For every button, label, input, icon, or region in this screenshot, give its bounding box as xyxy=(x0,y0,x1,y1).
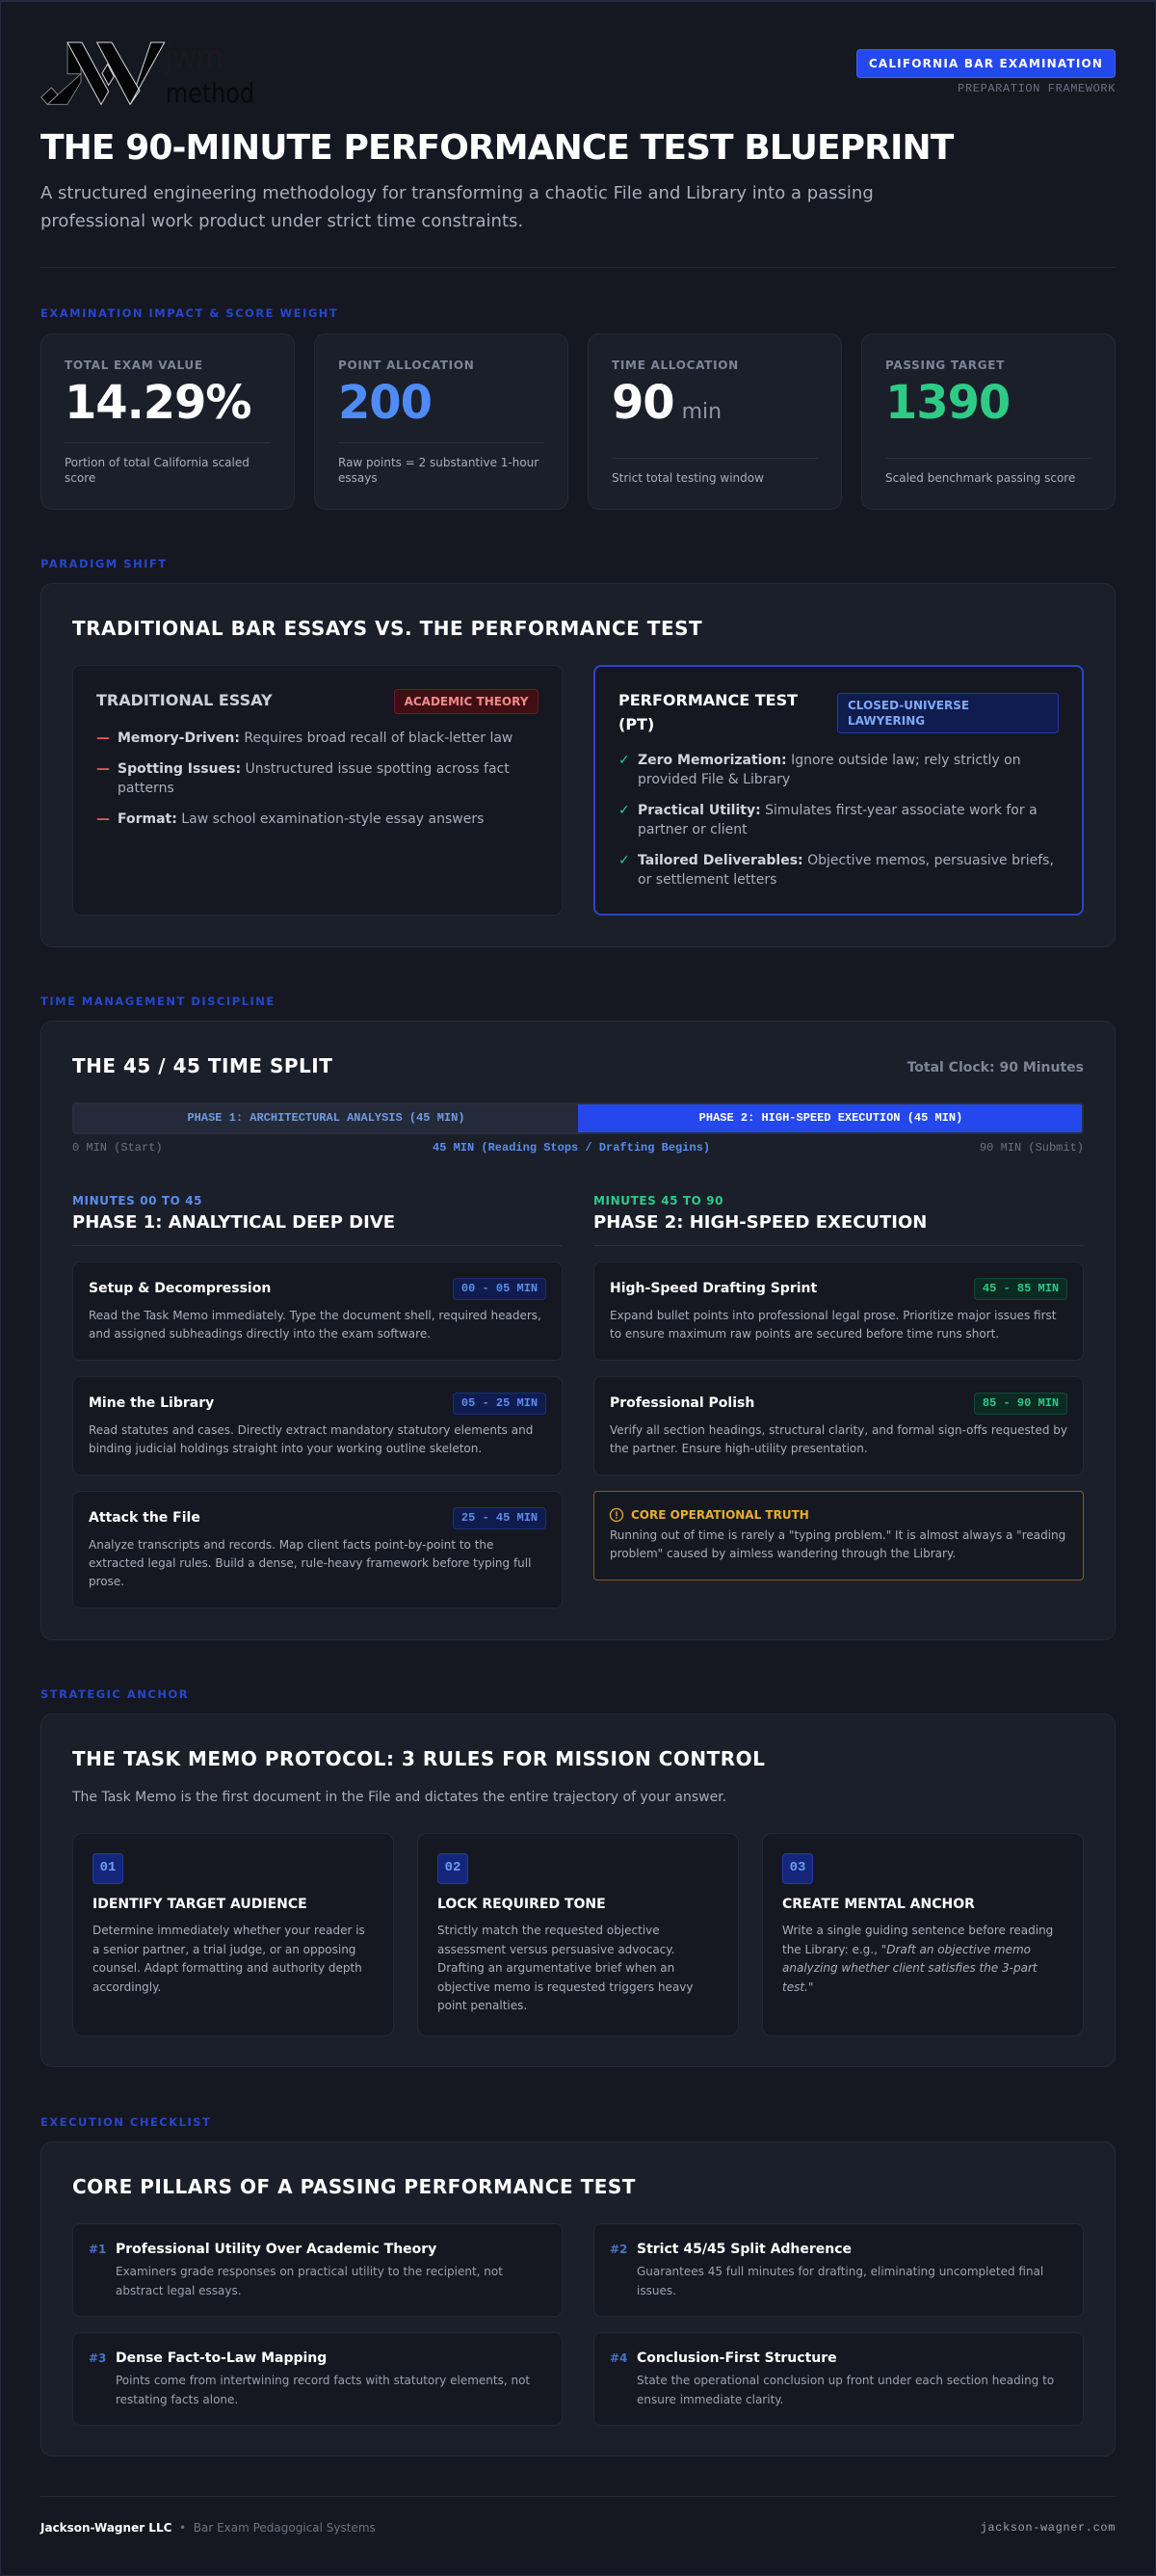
stat card: passing target: Scaled benchmark passing score xyxy=(885,471,1075,485)
rule card 3 xyxy=(762,1833,1084,2036)
stat card: total exam value: TOTAL EXAM VALUE xyxy=(65,359,203,372)
subtitle xyxy=(40,183,874,231)
panel: task memo protocol xyxy=(40,1713,1116,2067)
rule card 1: IDENTIFY TARGET AUDIENCE xyxy=(92,1897,307,1912)
pillar card 1: Professional Utility Over Academic Theory xyxy=(116,2242,436,2257)
column heading: phase 1: MINUTES 00 TO 45 xyxy=(72,1194,202,1208)
stat card: point allocation: Raw points = 2 substantive 1-hour essays xyxy=(338,456,539,485)
list: performance test items: Practical Utility: Simulates first-year associate work for a partner or client xyxy=(638,803,1038,837)
footer xyxy=(39,2521,1116,2535)
section label: execution checklist: EXECUTION CHECKLIST xyxy=(40,2115,211,2129)
badge: closed-universe lawyering: CLOSED-UNIVERSE xyxy=(848,699,969,712)
subtitle: A structured engineering methodology for transforming a chaotic File and Library into a passing xyxy=(40,183,874,203)
heading: THE 45 / 45 TIME SPLIT xyxy=(72,1054,332,1077)
stat card: total exam value: 14.29% xyxy=(65,376,250,430)
stat card: passing target: 1390 xyxy=(885,376,1010,430)
stat card: passing target xyxy=(861,333,1116,510)
rule card 3: Write a single guiding sentence before reading the Library: e.g., "Draft an objective memo analyzing whether client satisfies the 3-part test." xyxy=(782,1924,1053,1993)
step card: professional polish: 85 - 90 MIN xyxy=(983,1396,1059,1410)
pillar card 2: Strict 45/45 Split Adherence xyxy=(637,2242,852,2257)
panel: paradigm shift xyxy=(40,583,1116,947)
section label: strategic anchor: STRATEGIC ANCHOR xyxy=(40,1687,189,1701)
timeline marker: midpoint: 45 MIN (Reading Stops / Drafting Begins) xyxy=(433,1141,710,1155)
logo: jwm xyxy=(165,40,223,75)
step card: setup: Read the Task Memo immediately. Type the document shell, required headers, and assigned subheadings directly into the exam software. xyxy=(89,1309,541,1341)
rule card 2 xyxy=(417,1833,739,2036)
pillar card 4: State the operational conclusion up front under each section heading to ensure immediate clarity. xyxy=(637,2374,1054,2406)
callout text: Running out of time is rarely a "typing problem." It is almost always a "reading problem" caused by aimless wandering through the Library. xyxy=(610,1528,1065,1560)
step card: setup xyxy=(72,1261,563,1361)
logo xyxy=(40,40,254,109)
column heading: phase 1 xyxy=(72,1192,563,1246)
list: performance test items: ✓ xyxy=(618,853,630,868)
section label: time management: TIME MANAGEMENT DISCIPLINE xyxy=(40,995,276,1008)
list: traditional items: — xyxy=(96,730,110,746)
stat card: time allocation xyxy=(588,333,842,510)
stat card: point allocation: POINT ALLOCATION xyxy=(338,359,474,372)
step card: mine the library xyxy=(72,1376,563,1475)
list: traditional items: Format: Law school examination-style essay answers xyxy=(118,811,484,827)
rule card 2: 02 xyxy=(445,1860,460,1875)
step card: mine the library: Read statutes and cases. Directly extract mandatory statutory elements and binding judicial holdings straight into your working outline skeleton. xyxy=(89,1423,533,1455)
rule card 2: LOCK REQUIRED TONE xyxy=(437,1897,606,1912)
section label: examination impact: EXAMINATION IMPACT & SCORE WEIGHT xyxy=(40,306,338,320)
step card: setup: 00 - 05 MIN xyxy=(461,1282,538,1295)
rule card 3: 03 xyxy=(790,1860,805,1875)
heading: CORE PILLARS OF A PASSING PERFORMANCE TEST xyxy=(72,2175,636,2198)
stat card: total exam value: Portion of total California scaled score xyxy=(65,456,250,485)
step card: professional polish: Professional Polish xyxy=(610,1395,754,1411)
stat card: point allocation xyxy=(314,333,568,510)
callout: core operational truth xyxy=(593,1491,1084,1580)
step card: drafting sprint: Expand bullet points into professional legal prose. Prioritize major issues first to ensure maximum raw points are secured before time runs short. xyxy=(610,1309,1056,1341)
pillar card 4: Conclusion-First Structure xyxy=(637,2350,837,2366)
step card: mine the library: Mine the Library xyxy=(89,1395,214,1411)
badge: academic theory xyxy=(394,689,539,714)
bar segment: phase 2 xyxy=(578,1102,1084,1134)
rule card 1 xyxy=(72,1833,394,2036)
list: traditional items: Memory-Driven: Requires broad recall of black-letter law xyxy=(118,730,512,746)
footer company: Jackson-Wagner LLC • Bar Exam Pedagogical Systems xyxy=(40,2521,376,2535)
column heading: phase 1: PHASE 1: ANALYTICAL DEEP DIVE xyxy=(72,1212,395,1233)
list: performance test items: ✓ xyxy=(618,753,630,768)
list: traditional items: — xyxy=(96,761,110,777)
pillar card 3: Points come from intertwining record facts with statutory elements, not restating facts alone. xyxy=(116,2374,530,2406)
title: THE 90-MINUTE PERFORMANCE TEST BLUEPRINT xyxy=(40,128,953,168)
step card: drafting sprint: High-Speed Drafting Sprint xyxy=(610,1281,817,1296)
list: traditional items: — xyxy=(96,811,110,827)
list: traditional items: Spotting Issues: Unstructured issue spotting across fact patterns xyxy=(118,761,510,796)
step card: attack the file xyxy=(72,1491,563,1608)
performance test heading: PERFORMANCE TEST (PT) xyxy=(618,691,798,732)
heading: TRADITIONAL BAR ESSAYS VS. THE PERFORMANCE TEST xyxy=(72,617,702,640)
section label: paradigm shift: PARADIGM SHIFT xyxy=(40,557,168,571)
column heading: phase 2 xyxy=(593,1192,1084,1246)
pillar card 1: Examiners grade responses on practical utility to the recipient, not abstract legal essays. xyxy=(116,2265,503,2297)
badge: academic theory: ACADEMIC THEORY xyxy=(405,695,528,708)
stat card: point allocation: 200 xyxy=(338,376,432,430)
pillar card 2: Guarantees 45 full minutes for drafting, eliminating uncompleted final issues. xyxy=(637,2265,1043,2297)
traditional essay heading: TRADITIONAL ESSAY xyxy=(96,691,273,709)
badge: California Bar Examination: CALIFORNIA BAR EXAMINATION xyxy=(869,57,1103,70)
logo: method xyxy=(166,77,254,109)
list: traditional items xyxy=(96,730,512,827)
badge: California Bar Examination xyxy=(856,49,1116,78)
step card: drafting sprint: 45 - 85 MIN xyxy=(983,1282,1059,1295)
column heading: phase 2: MINUTES 45 TO 90 xyxy=(593,1194,723,1208)
list: performance test items xyxy=(618,753,1054,888)
pillar card 2: #2 xyxy=(610,2243,627,2256)
stat card: time allocation: TIME ALLOCATION xyxy=(612,359,739,372)
timeline bar xyxy=(72,1102,1084,1134)
total clock note: Total Clock: 90 Minutes xyxy=(907,1060,1084,1076)
step card: setup: Setup & Decompression xyxy=(89,1281,271,1296)
footer url: jackson-wagner.com xyxy=(981,2521,1116,2535)
intro text: The Task Memo is the first document in the File and dictates the entire trajectory of your answer. xyxy=(72,1790,726,1805)
pillar card 1 xyxy=(72,2223,563,2317)
panel: core pillars xyxy=(40,2141,1116,2456)
badge: closed-universe lawyering xyxy=(837,693,1059,733)
pillar card 3 xyxy=(72,2332,563,2426)
pillar card 3: #3 xyxy=(89,2351,106,2365)
pillar card 2 xyxy=(593,2223,1084,2317)
rule card 3: CREATE MENTAL ANCHOR xyxy=(782,1897,975,1912)
step card: professional polish xyxy=(593,1376,1084,1475)
stat card: time allocation: Strict total testing window xyxy=(612,471,764,485)
subtitle: professional work product under strict time constraints. xyxy=(40,211,523,231)
badge: closed-universe lawyering: LAWYERING xyxy=(848,714,925,728)
list: performance test items: Zero Memorization: Ignore outside law; rely strictly on provided File & Library xyxy=(638,753,1021,787)
step card: mine the library: 05 - 25 MIN xyxy=(461,1396,538,1410)
pillar card 4: #4 xyxy=(610,2351,627,2365)
icon: alert circle xyxy=(609,1507,624,1523)
step card: attack the file: Attack the File xyxy=(89,1510,200,1526)
stat card: time allocation: 90 min xyxy=(612,376,722,430)
pillar card 3: Dense Fact-to-Law Mapping xyxy=(116,2350,327,2366)
rule card 1: 01 xyxy=(100,1860,116,1875)
list: performance test items: ✓ xyxy=(618,803,630,818)
rule card 1: Determine immediately whether your reader is a senior partner, a trial judge, or an opposing counsel. Adapt formatting and authority depth accordingly. xyxy=(92,1924,365,1993)
stat card: passing target: PASSING TARGET xyxy=(885,359,1005,372)
step card: attack the file: Analyze transcripts and records. Map client facts point-by-point to the extracted legal rules. Build a dense, rule-heavy framework before typing full prose. xyxy=(89,1538,531,1588)
rule card 2: Strictly match the requested objective assessment versus persuasive advocacy. Drafting an argumentative brief when an objective memo is requested triggers heavy point penalties. xyxy=(437,1924,694,2012)
panel: time split xyxy=(40,1021,1116,1640)
heading: THE TASK MEMO PROTOCOL: 3 RULES FOR MISSION CONTROL xyxy=(72,1747,765,1770)
step card: drafting sprint xyxy=(593,1261,1084,1361)
logo mark xyxy=(41,42,165,104)
bar segment: phase 1: PHASE 1: ARCHITECTURAL ANALYSIS (45 MIN) xyxy=(187,1111,465,1125)
pillar card 1: #1 xyxy=(89,2243,106,2256)
card: traditional essay xyxy=(72,665,563,916)
callout heading: CORE OPERATIONAL TRUTH xyxy=(631,1508,809,1522)
step card: professional polish: Verify all section headings, structural clarity, and formal sign-offs requested by the partner. Ensure high-utility presentation. xyxy=(610,1423,1067,1455)
stat card: total exam value xyxy=(40,333,295,510)
step card: attack the file: 25 - 45 MIN xyxy=(461,1511,538,1525)
column heading: phase 2: PHASE 2: HIGH-SPEED EXECUTION xyxy=(593,1212,927,1233)
timeline marker: submit: 90 MIN (Submit) xyxy=(980,1141,1084,1155)
timeline marker: start: 0 MIN (Start) xyxy=(72,1141,163,1155)
preparation framework label: PREPARATION FRAMEWORK xyxy=(958,82,1116,95)
list: performance test items: Tailored Deliverables: Objective memos, persuasive briefs, or settlement letters xyxy=(638,853,1054,888)
card: performance test xyxy=(593,665,1084,916)
bar segment: phase 2: PHASE 2: HIGH-SPEED EXECUTION (45 MIN) xyxy=(699,1111,962,1125)
pillar card 4 xyxy=(593,2332,1084,2426)
